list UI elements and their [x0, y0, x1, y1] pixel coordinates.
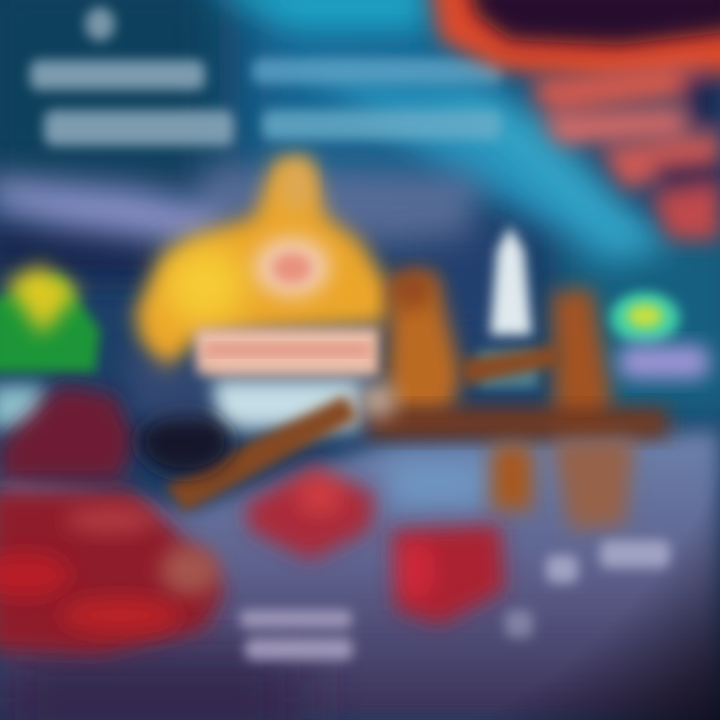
heading: blurred title text: [30, 7, 502, 146]
panel: top right dark red-framed sign: [430, 0, 720, 80]
icon: cyan and lavender badge: [610, 292, 710, 379]
icon: bridge towers: [360, 270, 668, 530]
icon: red die centre: [245, 465, 375, 560]
icon: green and yellow badge: [0, 265, 100, 372]
icon: gold marquee: [135, 157, 392, 375]
text block: blurred caption lower right: [505, 540, 670, 638]
icon: dark maroon shape left: [0, 350, 232, 480]
panel: table floor: [0, 385, 720, 720]
background: lavender band: [0, 165, 480, 245]
icon: red die right: [392, 525, 505, 625]
icon: white tower: [478, 226, 538, 388]
icon: red chips pile: [0, 490, 225, 655]
icon: marquee sign board: [195, 328, 380, 430]
background: cyan light streaks: [195, 0, 670, 265]
panel: red and pink stripes: [535, 62, 720, 240]
text block: blurred caption lower centre: [240, 610, 353, 660]
icon: wooden diagonal beam: [165, 395, 358, 512]
